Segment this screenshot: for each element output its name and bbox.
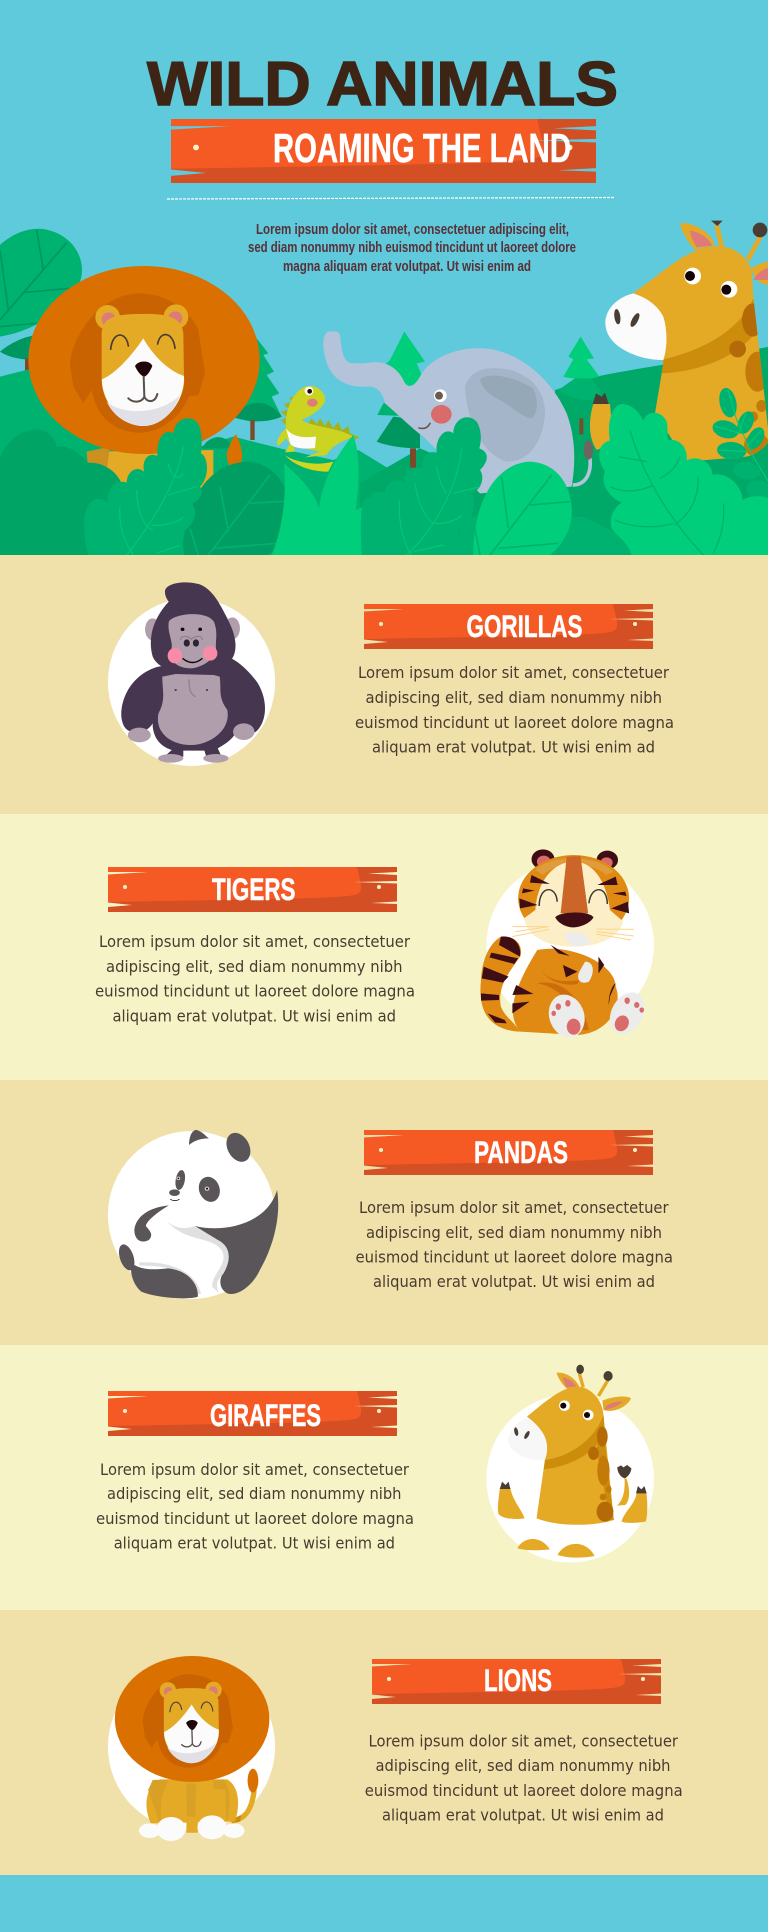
body text: adipiscing elit, sed diam nonummy nibh [366, 688, 662, 707]
body text: Lorem ipsum dolor sit amet, consectetuer [358, 663, 669, 682]
banner [108, 1391, 397, 1436]
body text: euismod tincidunt ut laoreet dolore magna [96, 1509, 414, 1528]
lizard [277, 386, 359, 472]
subtitle: ROAMING THE LAND [273, 125, 571, 171]
footer band [0, 1875, 768, 1932]
heading: PANDAS [474, 1134, 568, 1170]
body text [96, 1460, 414, 1553]
jungle scene [0, 221, 768, 555]
body text [355, 663, 674, 757]
intro text: Lorem ipsum dolor sit amet, consectetuer adipiscing elit, [256, 221, 569, 238]
body text: Lorem ipsum dolor sit amet, consectetuer [368, 1732, 678, 1751]
body text: adipiscing elit, sed diam nonummy nibh [107, 1484, 402, 1503]
body text: aliquam erat volutpat. Ut wisi enim ad [114, 1534, 395, 1553]
body text: Lorem ipsum dolor sit amet, consectetuer [359, 1198, 669, 1217]
heading: GIRAFFES [210, 1397, 321, 1433]
illustration: tiger [480, 849, 654, 1040]
intro text: sed diam nonummy nibh euismod tincidunt ut laoreet dolore [248, 239, 576, 256]
body text: aliquam erat volutpat. Ut wisi enim ad [373, 1272, 655, 1291]
body text: adipiscing elit, sed diam nonummy nibh [376, 1756, 670, 1775]
panel: pandas [0, 1080, 768, 1345]
body text [356, 1198, 673, 1291]
illustration: lion [108, 1656, 275, 1841]
illustration: gorilla [108, 582, 275, 766]
panel: giraffes [0, 1345, 768, 1610]
body text: Lorem ipsum dolor sit amet, consectetuer [100, 1460, 409, 1479]
panel: lions [0, 1610, 768, 1875]
panel: gorillas [0, 555, 768, 814]
background foliage right [360, 332, 768, 555]
body text [365, 1732, 683, 1825]
front foliage right [361, 404, 768, 555]
background foliage left [0, 229, 400, 555]
body text: euismod tincidunt ut laoreet dolore magna [365, 1781, 683, 1800]
title banner [171, 119, 596, 183]
small leaves [711, 386, 768, 502]
title: WILD ANIMALS [147, 50, 618, 119]
body text: adipiscing elit, sed diam nonummy nibh [366, 1223, 662, 1242]
body text: aliquam erat volutpat. Ut wisi enim ad [382, 1806, 664, 1825]
banner [372, 1659, 661, 1704]
body text: adipiscing elit, sed diam nonummy nibh [106, 957, 402, 976]
banner [364, 604, 653, 649]
heading: TIGERS [212, 871, 296, 907]
elephant [323, 331, 593, 493]
body text: aliquam erat volutpat. Ut wisi enim ad [112, 1007, 396, 1026]
heading: GORILLAS [466, 608, 582, 644]
banner [108, 867, 397, 912]
body text: euismod tincidunt ut laoreet dolore magna [356, 1248, 673, 1267]
body text: euismod tincidunt ut laoreet dolore magna [95, 982, 415, 1001]
dashed divider [167, 198, 614, 199]
body text: aliquam erat volutpat. Ut wisi enim ad [372, 738, 655, 757]
illustration: giraffe [486, 1365, 654, 1563]
body text: Lorem ipsum dolor sit amet, consectetuer [99, 932, 410, 951]
illustration: panda [108, 1130, 278, 1299]
body text [95, 932, 415, 1026]
banner [364, 1130, 653, 1175]
giraffe [590, 221, 768, 462]
body text: euismod tincidunt ut laoreet dolore magna [355, 713, 674, 732]
lion [28, 266, 260, 503]
intro text: magna aliquam erat volutpat. Ut wisi enim ad [283, 258, 531, 275]
intro text [248, 221, 576, 275]
panel: tigers [0, 814, 768, 1080]
front foliage left [0, 418, 377, 555]
heading: LIONS [484, 1662, 552, 1698]
